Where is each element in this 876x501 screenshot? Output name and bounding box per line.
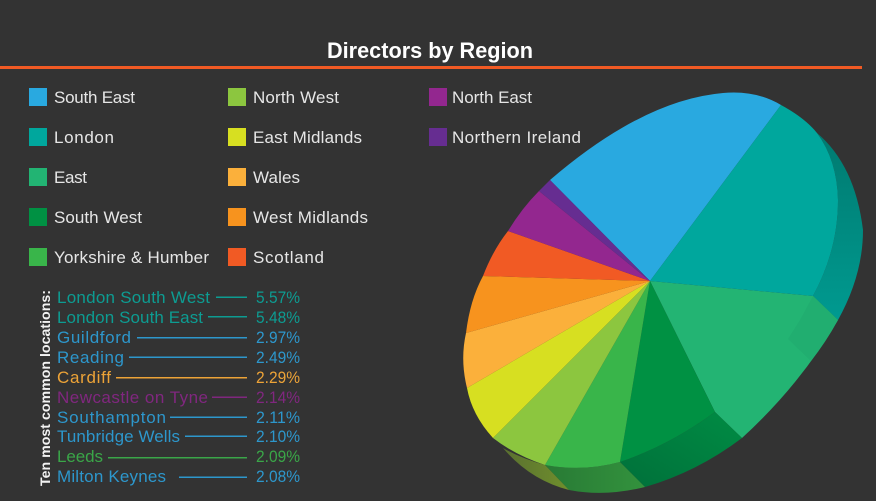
location: London South East: 5.48% bbox=[256, 308, 300, 327]
location: London South West bbox=[57, 288, 300, 307]
legend item: East bbox=[29, 168, 87, 187]
slice: North East bbox=[508, 191, 650, 281]
side face: North West bbox=[503, 448, 569, 490]
side face: Yorkshire and Humber bbox=[545, 462, 645, 493]
location: Southampton: Southampton bbox=[57, 408, 166, 427]
location: London South East bbox=[57, 308, 300, 327]
side face: South West bbox=[620, 412, 742, 487]
legend item: East Midlands: East Midlands bbox=[253, 128, 362, 147]
location: Newcastle on Tyne bbox=[57, 388, 300, 407]
legend item: Northern Ireland: Northern Ireland bbox=[452, 128, 581, 147]
location: London South West: London South West bbox=[57, 288, 210, 307]
slice: East including side face bbox=[650, 281, 838, 438]
3D pie chart bbox=[463, 92, 863, 493]
location: Reading: 2.49% bbox=[256, 348, 300, 367]
legend item: North East: North East bbox=[452, 88, 532, 107]
legend item: South West: South West bbox=[54, 208, 142, 227]
location: Guildford: Guildford bbox=[57, 328, 131, 347]
legend item: London: London bbox=[54, 128, 114, 147]
slice: West Midlands bbox=[466, 276, 650, 333]
location: Guildford: 2.97% bbox=[256, 328, 300, 347]
slice: London bbox=[650, 105, 838, 296]
slice: Scotland bbox=[483, 231, 650, 281]
slice: South West bbox=[620, 281, 715, 462]
slice: North West bbox=[493, 281, 650, 465]
slice: Wales bbox=[463, 281, 650, 388]
vertical heading: ten most common locations: Ten most common locations: bbox=[37, 290, 53, 486]
legend item: Scotland: Scotland bbox=[253, 248, 324, 267]
legend item: North West: North West bbox=[253, 88, 339, 107]
location: Leeds: Leeds bbox=[57, 447, 103, 466]
legend item: South East: South East bbox=[54, 88, 135, 107]
slice: South East bbox=[550, 92, 781, 281]
location: Tunbridge Wells: 2.10% bbox=[256, 427, 300, 446]
location: Cardiff bbox=[57, 368, 300, 387]
location: Newcastle on Tyne: 2.14% bbox=[256, 388, 300, 407]
location: Tunbridge Wells: Tunbridge Wells bbox=[57, 427, 180, 446]
legend item: Wales: Wales bbox=[253, 168, 300, 187]
location: Newcastle on Tyne: Newcastle on Tyne bbox=[57, 388, 208, 407]
location: Milton Keynes bbox=[57, 467, 300, 486]
location: London South East: London South East bbox=[57, 308, 203, 327]
locations list bbox=[57, 288, 300, 486]
location: Tunbridge Wells bbox=[57, 427, 300, 446]
legend item: West Midlands: West Midlands bbox=[253, 208, 368, 227]
slice: Yorkshire and Humber bbox=[545, 281, 650, 468]
side face: East shaded patch bbox=[788, 296, 838, 361]
legend bbox=[29, 88, 581, 267]
slice: East Midlands bbox=[467, 281, 650, 438]
location: Milton Keynes: 2.08% bbox=[256, 467, 300, 486]
location: Cardiff: 2.29% bbox=[256, 368, 300, 387]
location: Leeds bbox=[57, 447, 300, 466]
slice: Northern Ireland bbox=[539, 180, 650, 281]
location: Southampton: 2.11% bbox=[256, 408, 300, 427]
location: London South West: 5.57% bbox=[256, 288, 300, 307]
location: Leeds: 2.09% bbox=[256, 447, 300, 466]
title: Directors by Region bbox=[327, 38, 533, 63]
legend item: East: East bbox=[54, 168, 87, 187]
location: Milton Keynes: Milton Keynes bbox=[57, 467, 166, 486]
location: Southampton bbox=[57, 408, 300, 427]
location: Guildford bbox=[57, 328, 300, 347]
location: Reading bbox=[57, 348, 300, 367]
side face: London bbox=[813, 133, 863, 320]
location: Cardiff: Cardiff bbox=[57, 368, 111, 387]
legend item: Yorkshire & Humber: Yorkshire & Humber bbox=[54, 248, 209, 267]
location: Reading: Reading bbox=[57, 348, 124, 367]
legend item: Wales bbox=[228, 168, 300, 187]
